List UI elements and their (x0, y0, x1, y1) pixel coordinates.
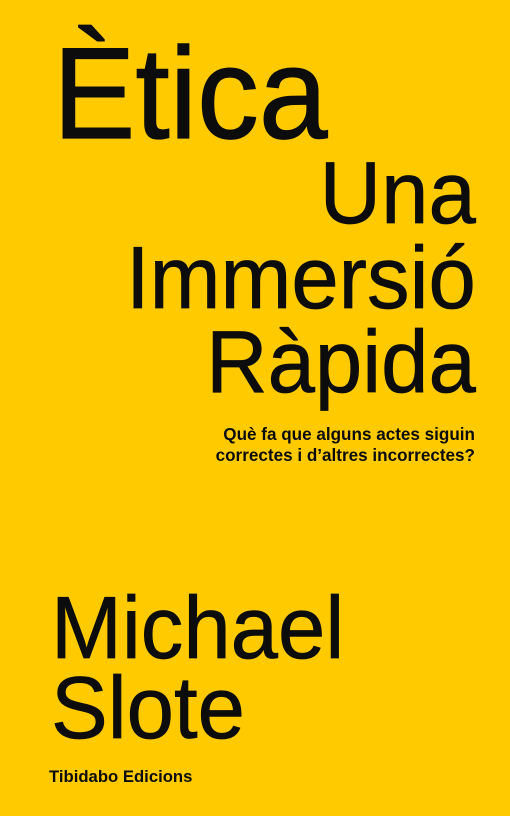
subtitle: Una Immersió Ràpida (126, 143, 476, 411)
subtitle: Una Immersió Ràpida: Immersió (126, 228, 476, 326)
subtitle: Una Immersió Ràpida: Una (319, 143, 476, 242)
author: Michael Slote: Slote (50, 658, 244, 757)
title: Ètica: Ètica (52, 20, 327, 166)
publisher: Tibidabo Edicions (49, 767, 192, 786)
author: Michael Slote: Michael (50, 578, 344, 677)
tagline (216, 424, 475, 465)
subtitle: Una Immersió Ràpida: Ràpida (206, 312, 476, 411)
tagline: Què fa que alguns actes siguin (223, 424, 475, 444)
tagline: correctes i d’altres incorrectes? (216, 446, 475, 465)
author: Michael Slote (50, 578, 344, 757)
